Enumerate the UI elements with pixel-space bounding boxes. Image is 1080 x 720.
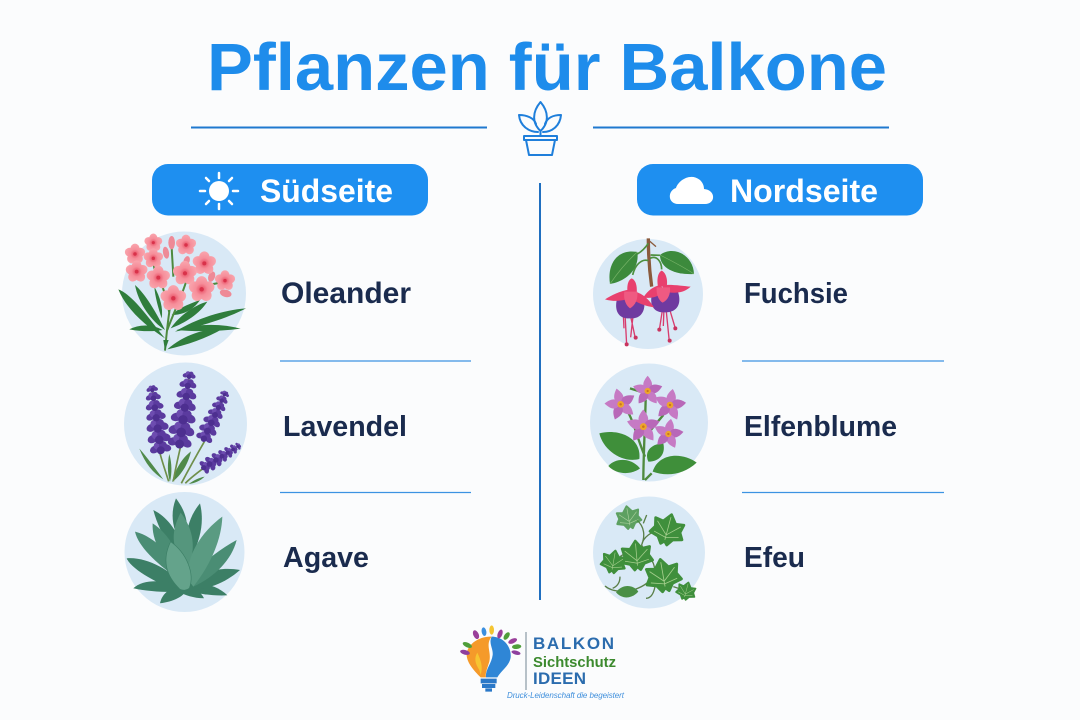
plant: Elfenblume illustration [590, 364, 708, 482]
plant: Fuchsie illustration [593, 238, 703, 349]
plant: Agave illustration [124, 492, 244, 612]
logo: Balkon Sichtschutz Ideen: Druck-Leidenschaft die begeistert [507, 691, 625, 700]
logo: Balkon Sichtschutz Ideen: IDEEN [533, 669, 586, 688]
label: Efeu: Efeu [744, 542, 805, 574]
panel: Südseite [118, 164, 471, 612]
plant: Efeu illustration [593, 496, 705, 608]
heading: Nordseite: Nordseite [730, 173, 878, 209]
label: Lavendel: Lavendel [283, 411, 407, 443]
logo: Balkon Sichtschutz Ideen: BALKON [533, 634, 614, 653]
icon: sun [200, 173, 238, 209]
title: Pflanzen für Balkone [207, 30, 887, 105]
heading: Nordseite [637, 164, 923, 216]
icon: cloud [670, 177, 713, 204]
plant: Oleander illustration [118, 232, 246, 356]
heading: Südseite: Südseite [260, 173, 393, 209]
plant: Lavendel illustration [124, 362, 247, 486]
heading: Südseite [152, 164, 428, 216]
label: Fuchsie: Fuchsie [744, 278, 848, 310]
logo: Balkon Sichtschutz Ideen [460, 625, 625, 700]
label: Oleander: Oleander [281, 277, 411, 310]
icon: colourful light bulb [460, 625, 522, 692]
logo: Balkon Sichtschutz Ideen: Sichtschutz [533, 654, 616, 671]
icon: potted plant [519, 102, 561, 155]
panel: Nordseite [590, 164, 944, 608]
label: Agave: Agave [283, 542, 369, 574]
label: Elfenblume: Elfenblume [744, 411, 897, 443]
